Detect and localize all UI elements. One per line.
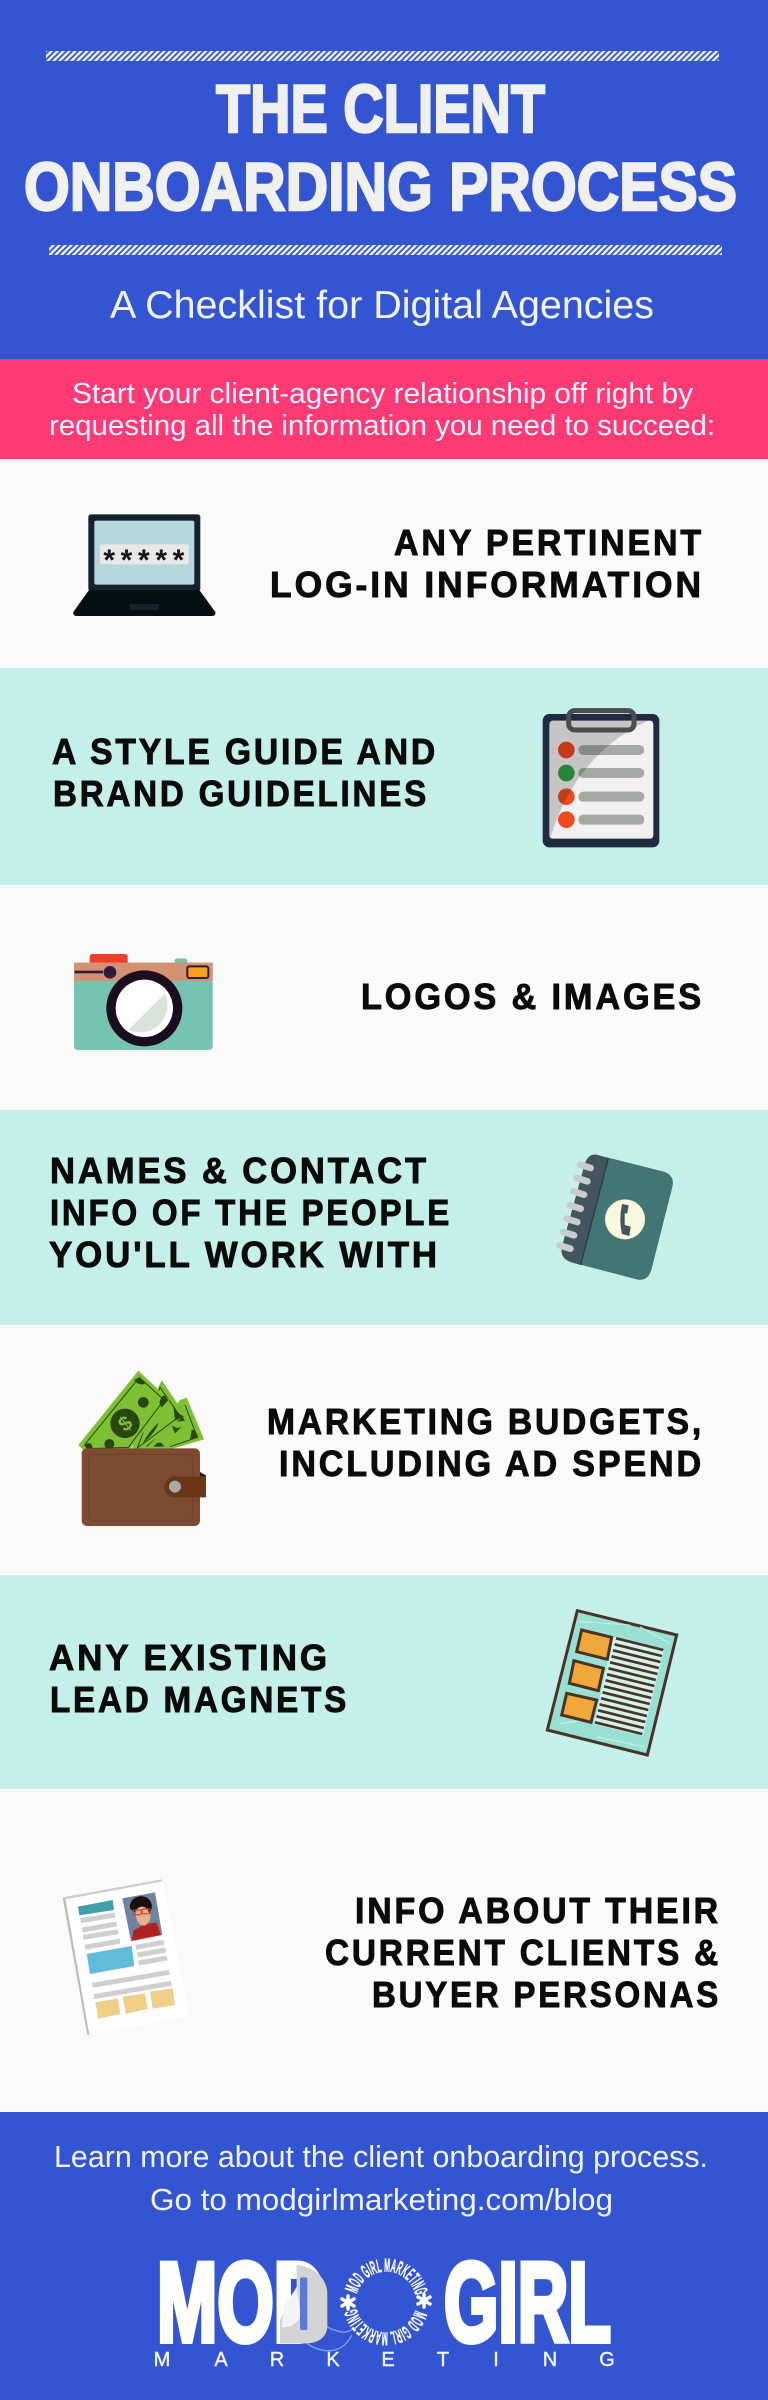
panel: current clients and buyer personas [0, 1789, 768, 2112]
label [270, 522, 704, 605]
label: BUYER PERSONAS [372, 1974, 721, 2015]
label [49, 1637, 349, 1720]
panel: lead magnets [0, 1575, 768, 1789]
label: LOG-IN INFORMATION [270, 564, 704, 605]
icon: sketched document [547, 1611, 677, 1755]
panel: log-in information [0, 459, 768, 668]
panel: names and contact info [0, 1110, 768, 1325]
call to action [54, 2139, 708, 2217]
icon: laptop [73, 514, 215, 616]
label: ANY PERTINENT [394, 522, 704, 563]
logo: Mod Girl Marketing [154, 2240, 615, 2371]
label [49, 1150, 452, 1275]
intro text: Start your client-agency relationship off right by [72, 378, 694, 410]
panel: marketing budgets [0, 1325, 768, 1575]
label: BRAND GUIDELINES [53, 773, 429, 814]
label: YOU'LL WORK WITH [49, 1234, 440, 1275]
label [325, 1890, 721, 2015]
call to action: Learn more about the client onboarding process. [54, 2139, 708, 2174]
icon: wallet with cash: $ [114, 1411, 138, 1437]
panel: style guide [0, 668, 768, 885]
label: LOGOS & IMAGES [361, 976, 704, 1017]
logo: Mod Girl Marketing: MOD GIRL MARKETING [344, 2309, 428, 2346]
panel: footer [0, 2112, 768, 2400]
top hatched rule [46, 51, 719, 61]
label: INCLUDING AD SPEND [279, 1443, 704, 1484]
panel: intro banner [0, 359, 768, 459]
panel: logos and images [0, 885, 768, 1110]
logo: Mod Girl Marketing: MOD GIRL MARKETING [344, 2258, 428, 2295]
icon: clipboard [543, 711, 659, 847]
title: THE CLIENT [216, 71, 545, 147]
intro text: requesting all the information you need to succeed: [49, 410, 715, 442]
label: INFO ABOUT THEIR [355, 1890, 721, 1931]
label: A STYLE GUIDE AND [52, 731, 438, 772]
call to action: Go to modgirlmarketing.com/blog [150, 2182, 613, 2217]
label [267, 1401, 704, 1484]
label: INFO OF THE PEOPLE [50, 1192, 452, 1233]
logo: Mod Girl Marketing: GIRL [444, 2240, 611, 2365]
intro text [49, 378, 715, 442]
label: CURRENT CLIENTS & [325, 1932, 721, 1973]
icon: laptop: ***** [103, 544, 185, 577]
subtitle: A Checklist for Digital Agencies [110, 284, 654, 327]
panel: header [0, 0, 768, 359]
icon: wallet with cash [78, 1371, 206, 1526]
icon: resume sheet [63, 1879, 189, 2035]
label: NAMES & CONTACT [50, 1150, 429, 1191]
label: ANY EXISTING [49, 1637, 330, 1678]
bottom hatched rule [49, 245, 722, 255]
label [52, 731, 438, 814]
icon: address book [560, 1155, 673, 1280]
label: MARKETING BUDGETS, [267, 1401, 704, 1442]
icon: camera [74, 954, 213, 1050]
label: LEAD MAGNETS [50, 1679, 349, 1720]
title [24, 71, 737, 225]
logo: Mod Girl Marketing: MOD [157, 2240, 326, 2365]
logo: Mod Girl Marketing: MARKETING [154, 2349, 615, 2371]
